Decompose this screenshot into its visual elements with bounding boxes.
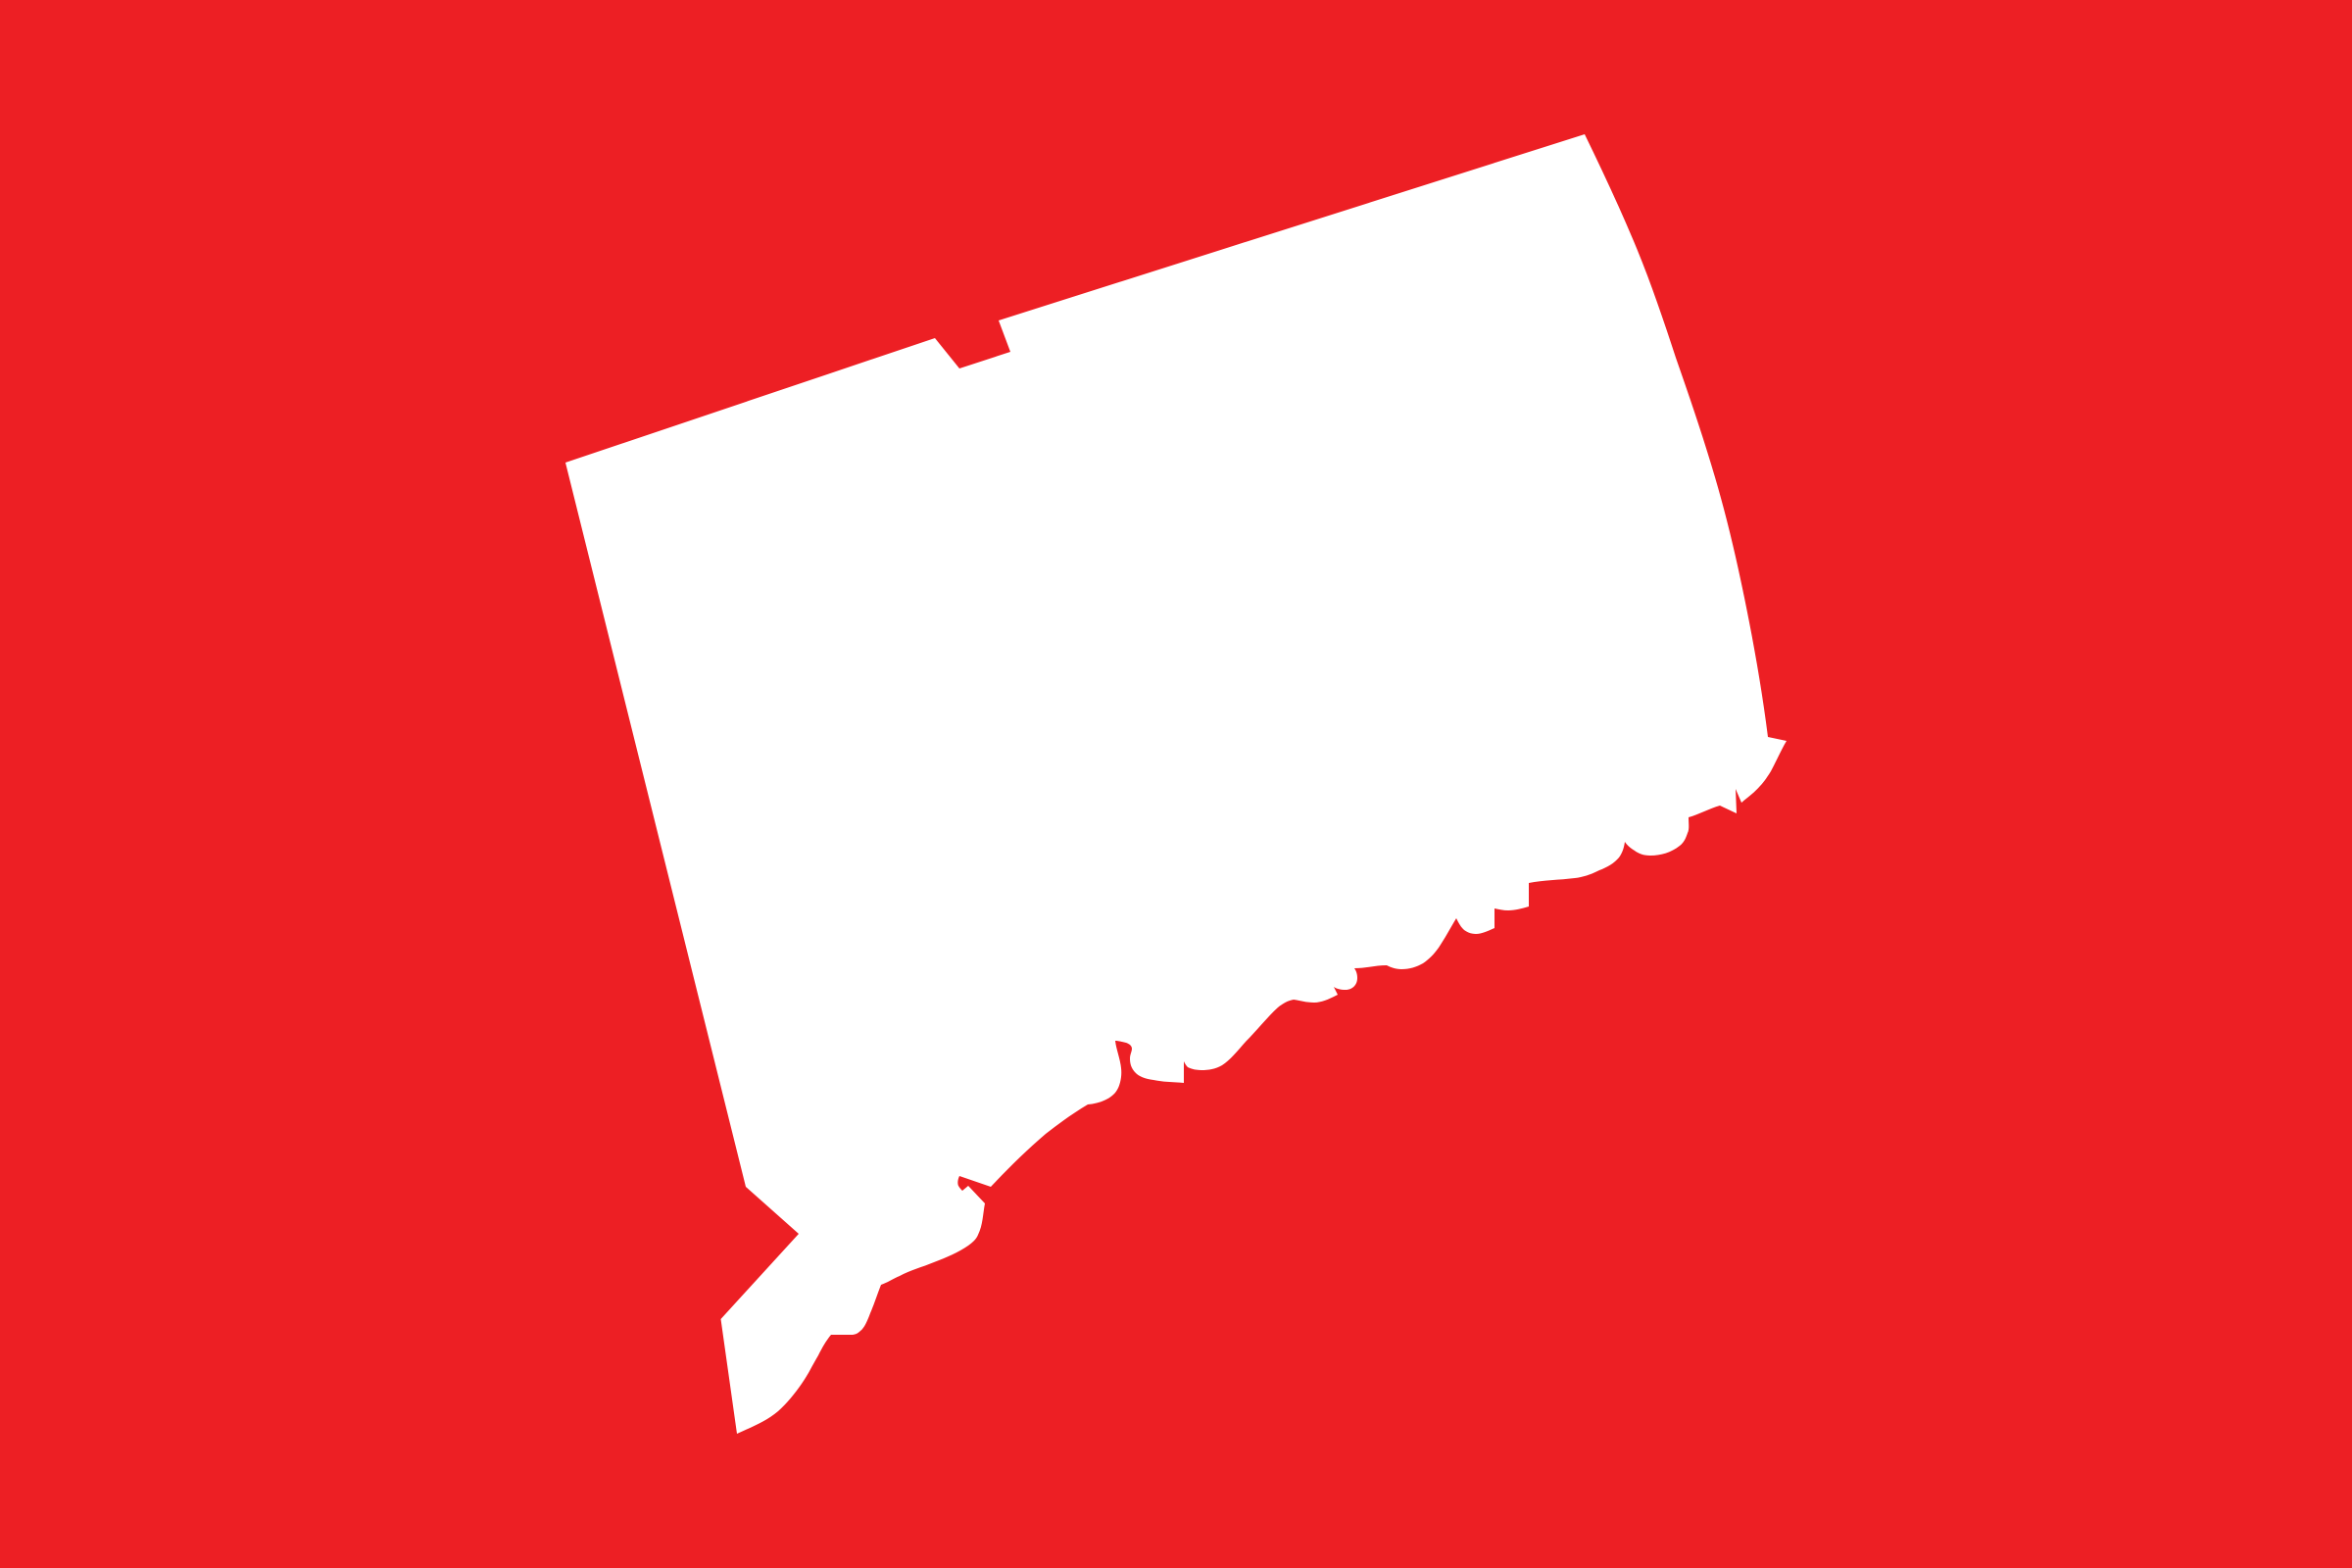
icon: Connecticut state silhouette <box>565 134 1787 1434</box>
